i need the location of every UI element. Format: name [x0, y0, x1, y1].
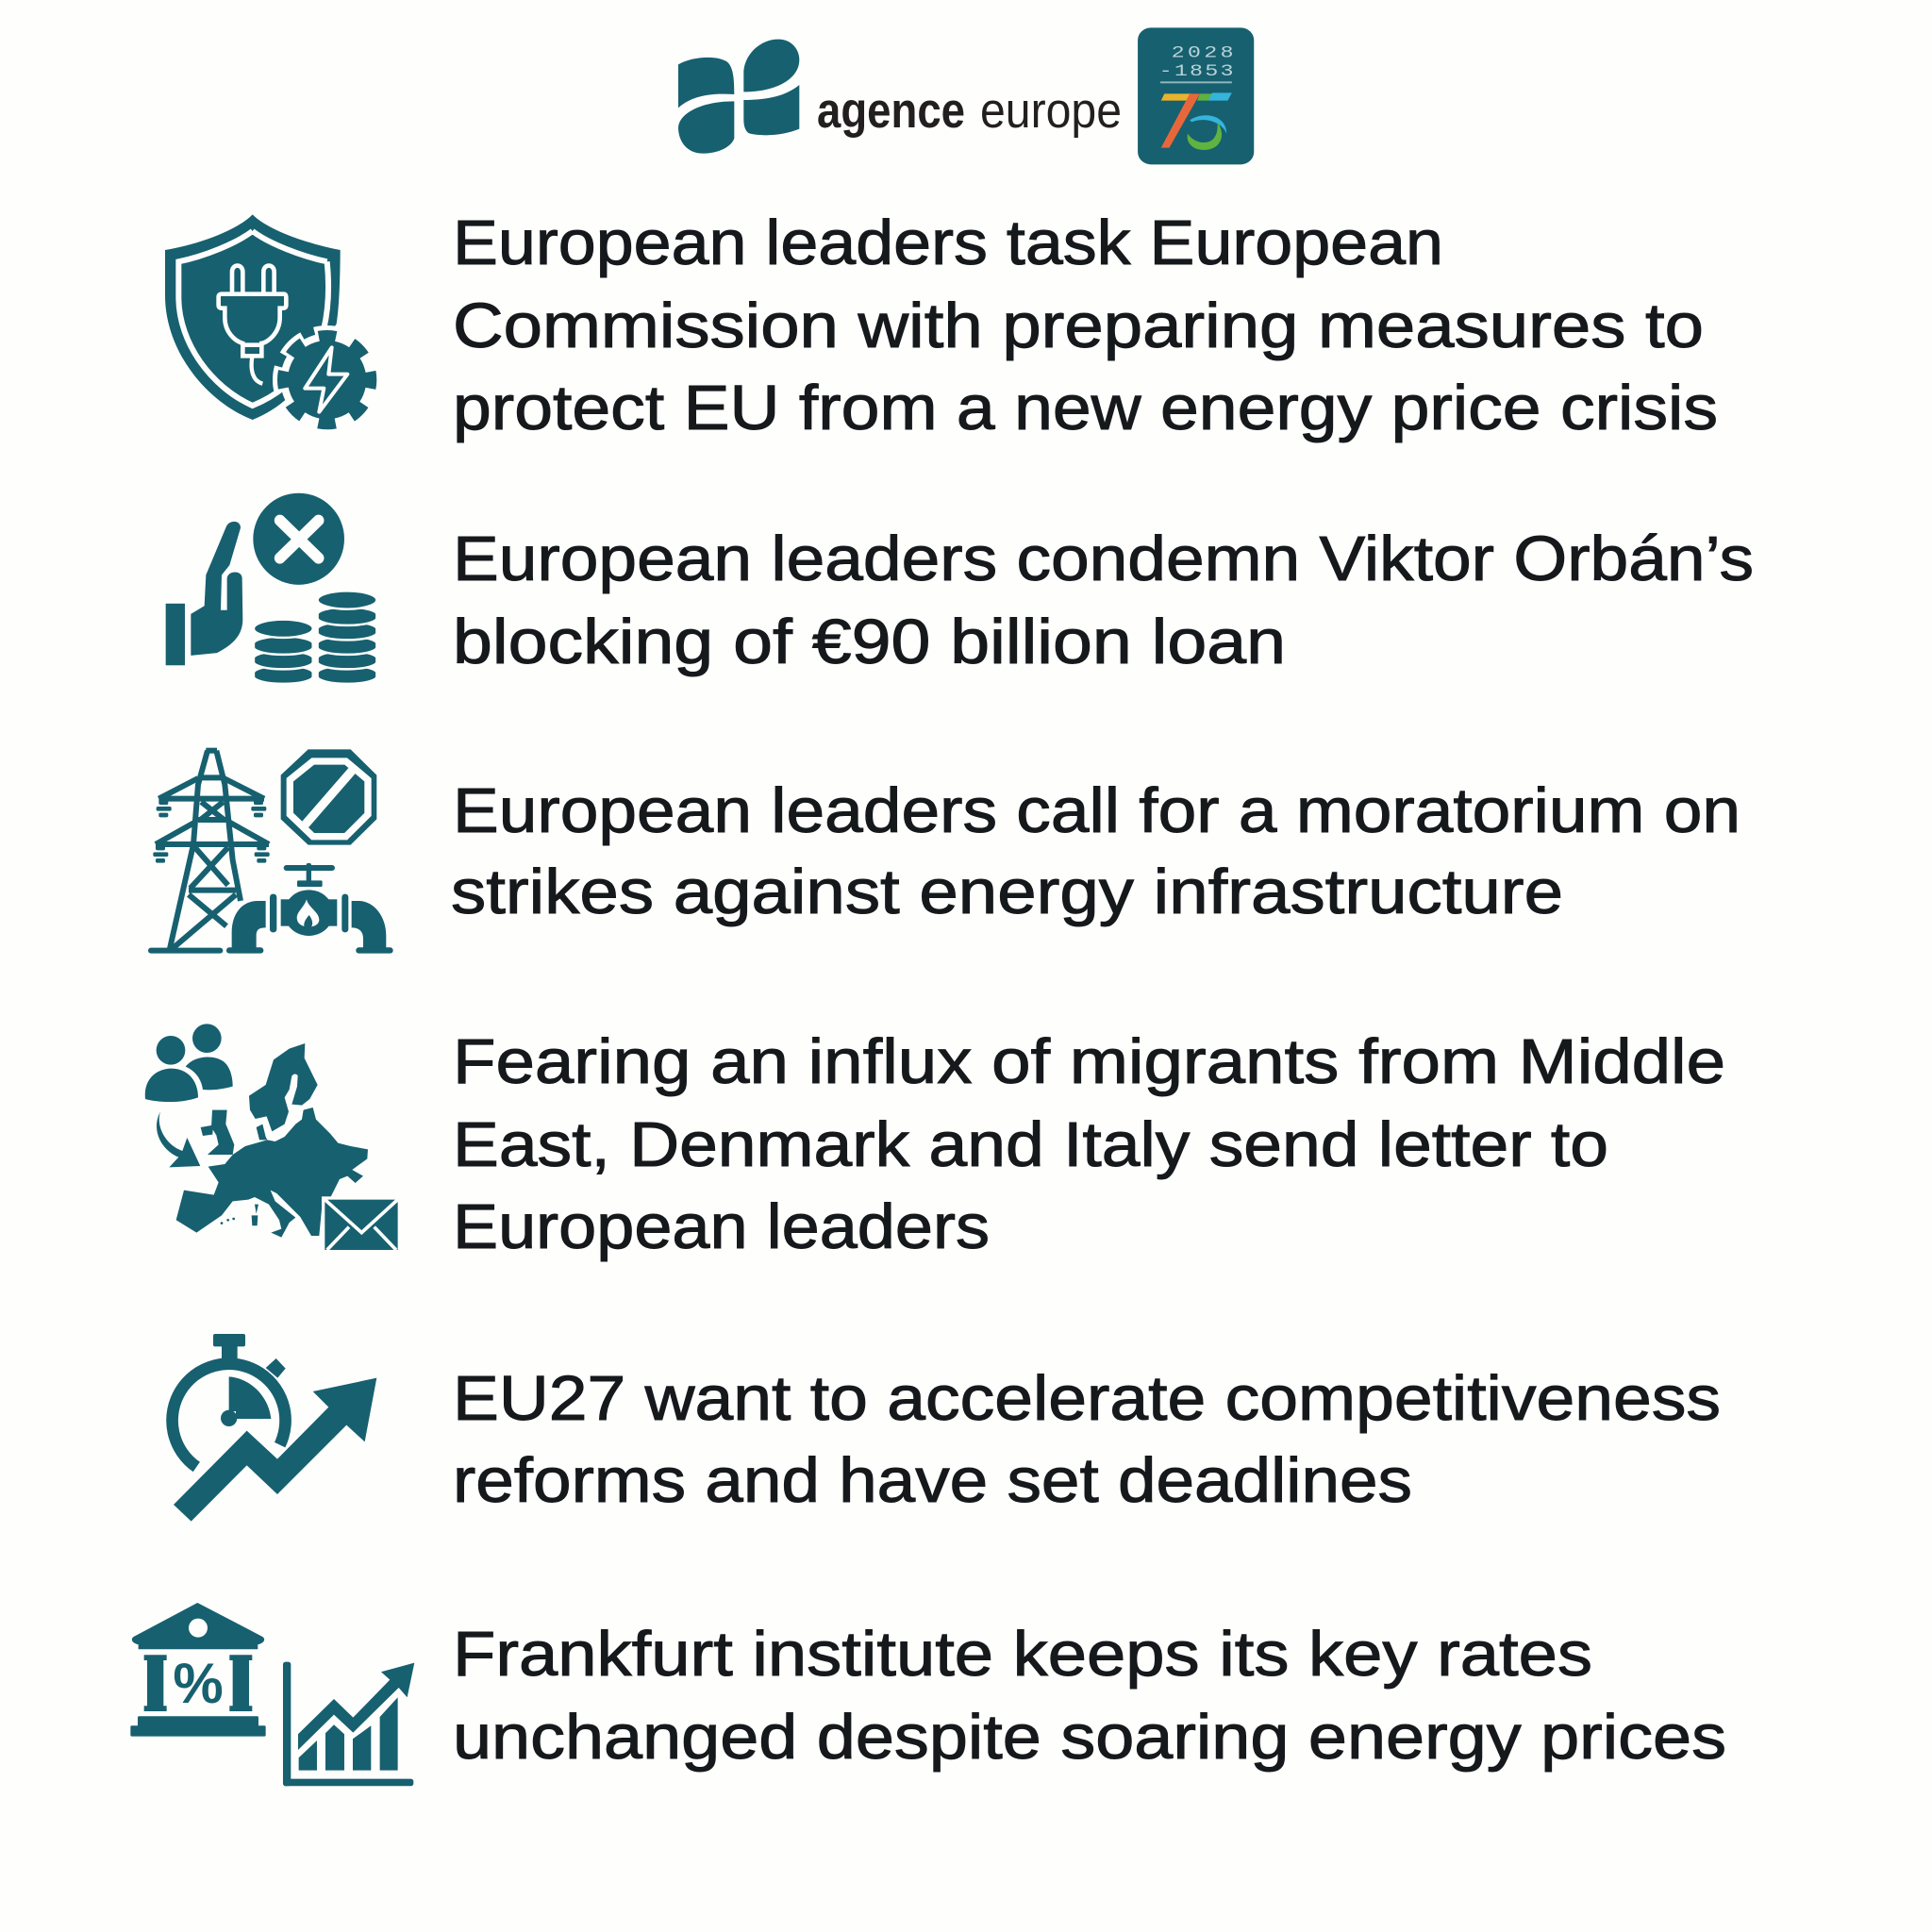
icon: migrants, Europe map and letter — [145, 1024, 399, 1252]
envelope — [324, 1198, 399, 1252]
arrow — [157, 1111, 200, 1167]
header: logos — [678, 27, 1254, 164]
text: migrants letter: East, Denmark and Italy send letter to — [453, 1109, 1608, 1180]
icon: shield with plug and gear — [165, 214, 374, 426]
text: competitiveness: EU27 want to accelerate competitiveness — [453, 1363, 1721, 1434]
text: energy price crisis: European leaders task European — [453, 208, 1443, 278]
text: migrants letter: European leaders — [453, 1191, 990, 1262]
wordmark: europe — [980, 83, 1122, 139]
wordmark: agence — [817, 83, 965, 139]
people — [145, 1024, 233, 1102]
text: energy price crisis: Commission with preparing measures to — [453, 291, 1704, 361]
anniversary badge: 2028 — [1172, 44, 1234, 63]
text: energy price crisis — [453, 208, 1718, 443]
logo mark — [678, 40, 799, 154]
text: competitiveness — [453, 1363, 1721, 1516]
text: energy price crisis: protect EU from a new energy price crisis — [453, 373, 1718, 443]
text: competitiveness: reforms and have set deadlines — [453, 1445, 1412, 1516]
text: key rates — [453, 1619, 1726, 1773]
text: moratorium — [451, 775, 1740, 927]
icon: stopwatch and rising arrow — [173, 1334, 376, 1522]
icon: pylon, stop sign and gas valve — [151, 749, 393, 954]
text: key rates: unchanged despite soaring energy prices — [453, 1702, 1726, 1773]
text: migrants letter — [453, 1026, 1725, 1262]
map — [176, 1043, 368, 1238]
text: moratorium: European leaders call for a moratorium on — [453, 775, 1740, 846]
anniversary badge: -1853 — [1159, 62, 1234, 81]
anniversary badge — [1138, 27, 1254, 164]
wordmark — [817, 83, 1122, 139]
text: moratorium: strikes against energy infrastructure — [451, 857, 1563, 927]
text: loan blocking: blocking of €90 billion loan — [453, 607, 1286, 677]
text: loan blocking — [453, 524, 1754, 677]
text: loan blocking: European leaders condemn Viktor Orbán’s — [453, 524, 1754, 594]
text: migrants letter: Fearing an influx of migrants from Middle — [453, 1026, 1725, 1097]
icon: bank with percent and rising chart: % — [173, 1652, 224, 1715]
text: key rates: Frankfurt institute keeps its key rates — [453, 1619, 1592, 1690]
icon: bank with percent and rising chart — [130, 1603, 414, 1786]
icon: hand stopping coins — [166, 493, 376, 684]
